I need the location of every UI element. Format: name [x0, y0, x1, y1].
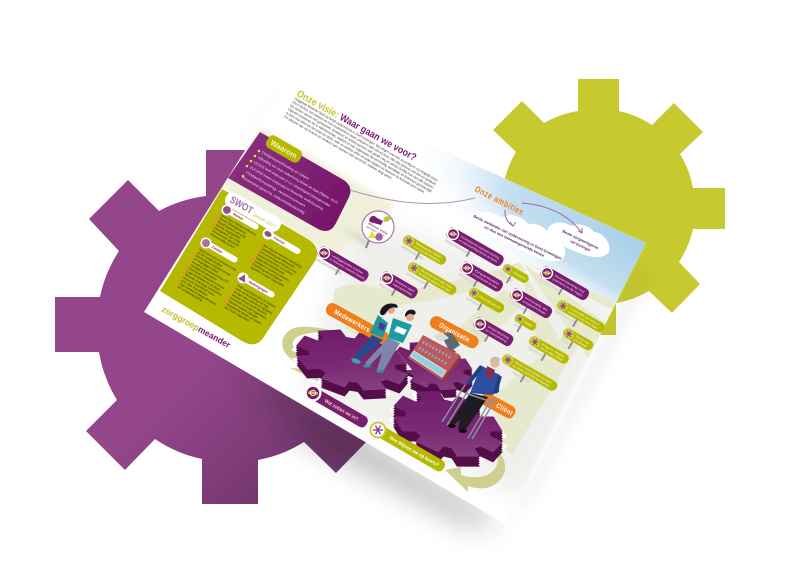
SWOT: zwakte: Versnipperde processen — [190, 263, 218, 282]
poster: paper sheet and its contents — [144, 80, 646, 524]
sign G5: aanbod in de hele regio — [567, 310, 599, 330]
waarom text: Uitbreiding van onze ouderenzorg binnen de regio (Rijksaz. 2017) — [257, 155, 339, 205]
SWOT: zwakte: en de locaties — [180, 279, 209, 297]
sign G9: en voelen zich thuis bij Meander — [512, 364, 550, 388]
sign G4 — [463, 286, 506, 321]
label: medewerkers — [324, 301, 391, 346]
intro paragraph: Onze cliënten, hun naasten en onze medewerkers staan centraal in alles wat wij doen, elke dag opnieuw, met hart en aandacht. — [291, 100, 437, 187]
SWOT: kansen: Nieuwe woonvormen voor ouderen — [257, 253, 294, 276]
sign P3 — [441, 226, 505, 274]
waarom text: ZLA 2016 zware zorgvraag en financiële onderbouwing — [249, 165, 324, 211]
cloud: beste zorgwerkgever: van Groningen — [570, 238, 592, 253]
cloud: beste aanbieder: Beste aanbieder van ouderenzorg in Oost-Groningen — [473, 213, 563, 261]
SWOT: zwakte — [174, 235, 240, 309]
sign G2 — [402, 260, 458, 303]
sign G4: Financieel gezond — [478, 294, 501, 310]
sign P2 — [375, 270, 420, 306]
SWOT: bedreigingen: en hun naasten — [224, 305, 250, 323]
SWOT: zwakte: tussen de verschillende teams — [182, 275, 216, 297]
panel: SWOT — [160, 189, 317, 344]
intro paragraph: In deze visie laten we zien waar we staan, waar we naartoe willen en welke stappen we daarvoor de komende jaren zetten. — [285, 111, 426, 194]
illustration: nurse woman — [351, 303, 398, 365]
sign P1: Leidinggevenden coachen — [331, 254, 364, 275]
heading: waarom tab: Waarom — [269, 138, 299, 161]
intro paragraph: We werken samen met gemeenten, huisartsen en andere partners aan goede zorg en welzijn dichtbij huis voor alle ouderen. — [289, 104, 435, 190]
sign G5: Continuïteit van zorg en — [569, 306, 601, 327]
label: client — [479, 391, 517, 420]
sign P7 — [468, 316, 515, 354]
sign G7: maat — [573, 338, 588, 349]
SWOT: kansen: Inzet van technologie en domotica in zorg — [259, 250, 297, 274]
sign P3: en samenwerking binnen de keten — [458, 238, 498, 264]
pill: hoe blijven we op koers — [366, 418, 448, 475]
pill: wat zetten we in — [301, 381, 371, 431]
SWOT: zwakte: Beperkte digitale vaardigheden van team — [195, 254, 232, 277]
cloud: beste zorgwerkgever: Beste zorgwerkgever — [562, 228, 600, 251]
heading: onze ambities: Onze ambities — [473, 184, 526, 217]
label: organisatie: Organisatie — [438, 322, 471, 344]
sign P4 — [455, 260, 505, 299]
sign G1 — [397, 233, 448, 273]
SWOT: bedreigingen: Bedreigingen — [248, 280, 269, 294]
sign G7: Zorg op — [575, 334, 590, 345]
sign: analysis badge: januari 2017 — [365, 224, 385, 238]
arrow: waarom to ambities — [350, 190, 475, 203]
heading: SWOT pill: januari 2017 — [252, 212, 277, 229]
SWOT: sterkte: Financieel gezond — [212, 229, 240, 248]
SWOT: sterkte: Breed aanbod van zorg — [217, 220, 247, 239]
SWOT: zwakte: op een aantal locaties — [197, 251, 223, 268]
sign G9: Cliënten ervaren kwaliteit van leven — [514, 360, 553, 385]
SWOT: sterkte: Vastgoed op orde — [213, 226, 242, 244]
SWOT: zwakte: Onvoldoende zichtbaarheid in de regio — [188, 266, 225, 290]
intro paragraph: Zo blijven we op koers en maken we samen het verschil, iedere dag weer. — [283, 115, 393, 181]
waarom bullets — [242, 150, 260, 177]
sign P6: zorgtechnologie — [522, 299, 547, 316]
gear 3D: client — [377, 378, 519, 480]
gear: olive background gear — [472, 79, 725, 335]
sign G1: voor ons als werkgever — [413, 244, 441, 263]
SWOT: sterkte: Deskundige en betrokken medewerkers — [220, 213, 257, 237]
sign P6: Innovatie en — [524, 296, 549, 312]
waarom text: Doelgroepverbreding en extern — [261, 150, 310, 181]
sign P2: vakmanschap — [392, 282, 413, 297]
paper background — [144, 127, 646, 520]
sign G8: Eigen regie — [541, 342, 566, 359]
gear 3D: organisatie — [382, 332, 484, 408]
SWOT: zwakte: Zwakte — [211, 245, 223, 254]
sign: analysis badge — [343, 211, 394, 248]
SWOT: kansen: Kansen — [273, 236, 286, 246]
heading: SWOT pill: SWOT — [227, 195, 255, 217]
SWOT: bedreigingen: Concurrentie van nieuwe zorgaanbieders — [229, 296, 268, 320]
sign G9 — [496, 352, 559, 399]
SWOT: sterkte: Kleinschalig wonen — [210, 232, 236, 250]
sign P4: en processen op orde — [472, 272, 499, 290]
sign G2: Medewerkers zijn trots — [420, 268, 454, 290]
sign P5 — [535, 265, 591, 308]
sign P5: partners in de regio — [552, 277, 584, 298]
arrow: right swoosh — [445, 447, 505, 492]
sign P2: Werken aan — [394, 279, 415, 293]
sign P1: en medewerkers ontwikkelen (Jaarplan) — [329, 257, 366, 280]
waarom text: Financieel gezond, toekomstbestendig — [241, 175, 305, 215]
sign G7 — [557, 326, 595, 359]
sign P7: Ondersteuning — [487, 325, 510, 340]
arrow: left swoosh — [282, 327, 340, 382]
SWOT: kansen: Vrijwilligers en mantelzorg versterken — [254, 259, 290, 283]
signs group — [312, 226, 606, 399]
SWOT: zwakte: Hoge werkdruk bij wijkgerichte teams — [179, 282, 217, 306]
sign G5 — [551, 298, 606, 341]
SWOT: zwakte: Verouderde informatievoorziening en ICT — [191, 260, 230, 284]
logo: zorggroepmeander: zorggroepmeander — [160, 304, 233, 350]
SWOT: sterkte: Sterkte — [232, 212, 244, 221]
sign G3: Vitaliteit — [512, 270, 527, 281]
sign P6 — [505, 287, 554, 326]
SWOT: kansen — [247, 226, 303, 291]
SWOT: kansen: Samenwerking met ketenpartners — [261, 247, 296, 269]
arrows: ambities to clouds — [505, 203, 582, 233]
SWOT: kansen: Regionale krimpaanpak — [255, 256, 285, 276]
SWOT: sterkte: Sterke regiopositie — [215, 223, 242, 240]
waarom text: Uit 2015 heeft onderzoek in o.a. zorgvastgoed plaatsgevonden — [253, 160, 331, 208]
sign P3: Vernieuwing van organisatie-inrichting — [460, 235, 500, 260]
sign P1 — [312, 245, 370, 289]
sign G2: en hebben plezier in het werk — [418, 272, 452, 293]
SWOT: kansen: Profilering als werkgever — [252, 262, 284, 283]
sign: analysis badge: Missie Visie — [368, 221, 389, 236]
illustration: elderly man with walker — [442, 357, 500, 439]
sign G8 — [523, 334, 571, 372]
sign G6 — [509, 313, 538, 339]
SWOT: bedreigingen: Toename complexe zorgvragen — [228, 299, 259, 320]
illustration: nurse man — [363, 310, 416, 373]
sign P4: Organisatie — [474, 269, 501, 286]
sign P7: en huisvesting — [485, 328, 508, 344]
panel: waarom — [228, 132, 350, 231]
SWOT: sterkte: Goede cliëntwaardering — [219, 217, 247, 235]
SWOT: bedreigingen: Strengere eisen vanuit wet- en regelgeving — [233, 290, 273, 315]
SWOT: zwakte: Beperkte onderlinge kennisdeling — [184, 272, 223, 297]
gear: purple background gear — [55, 150, 400, 504]
cloud: beste aanbieder: en dus een toonaangevende keuze — [484, 224, 546, 258]
label: medewerkers: Medewerkers — [333, 309, 371, 334]
label: client: Cliënt — [495, 403, 514, 417]
SWOT: zwakte: en leidinggevenden — [193, 257, 220, 274]
cloud: beste zorgwerkgever — [547, 222, 610, 257]
sign G6: Kwaliteit — [523, 320, 533, 328]
SWOT: kansen: Opleiden in eigen organisatie — [250, 265, 285, 288]
poster drop shadow — [146, 88, 650, 525]
sign P5: Samenwerking met — [554, 274, 586, 294]
pill: wat zetten we in: Wat zetten we in? — [323, 398, 359, 422]
SWOT: bedreigingen: Krapte op de arbeidsmarkt in de zorgsector — [236, 283, 277, 309]
SWOT: kansen: Meer vraag naar thuiszorg en wijkverpleging — [262, 243, 303, 269]
SWOT: bedreigingen: Krimp van de bevolking in de regio — [235, 287, 270, 309]
heading: SWOT pill — [222, 190, 284, 234]
title: Onze visie: Waar gaan we voor? — [295, 89, 418, 164]
label: organisatie — [428, 314, 481, 350]
sign G8: van de cliënt (2018) — [539, 346, 564, 362]
waarom text: Onderbouwing, woonvormen — [245, 170, 306, 208]
intro paragraph: Zorggroep Meander biedt de beste ouderenzorg in Oost-Groningen. Wij zorgen voor een zo prettig en vrij mogelijk leven. — [294, 96, 439, 183]
intro paragraph: Daarom investeren we in vakmanschap, vitaliteit en een organisatie die eenvoudig, wendbaar en financieel gezond blijft. — [287, 107, 433, 194]
sign G1: Medewerkers kiezen — [415, 241, 443, 260]
SWOT: zwakte: en ondersteuning — [177, 285, 203, 302]
SWOT: bedreigingen — [221, 270, 277, 331]
SWOT: bedreigingen: Veranderende wensen van cliënten — [226, 302, 262, 326]
SWOT: bedreigingen: Dalende tarieven bij de financiers — [231, 293, 268, 316]
illustration: building — [408, 332, 461, 382]
gear 3D: medewerkers — [281, 318, 423, 411]
pill: hoe blijven we op koers: Hoe blijven we op koers? — [388, 435, 440, 468]
SWOT: zwakte: Lage flexibiliteit in roosters — [186, 269, 221, 292]
SWOT: sterkte — [207, 202, 261, 256]
sign G3 — [497, 263, 530, 292]
SWOT: zwakte: Hoog ziekteverzuim en personeelsverloop — [198, 247, 237, 272]
